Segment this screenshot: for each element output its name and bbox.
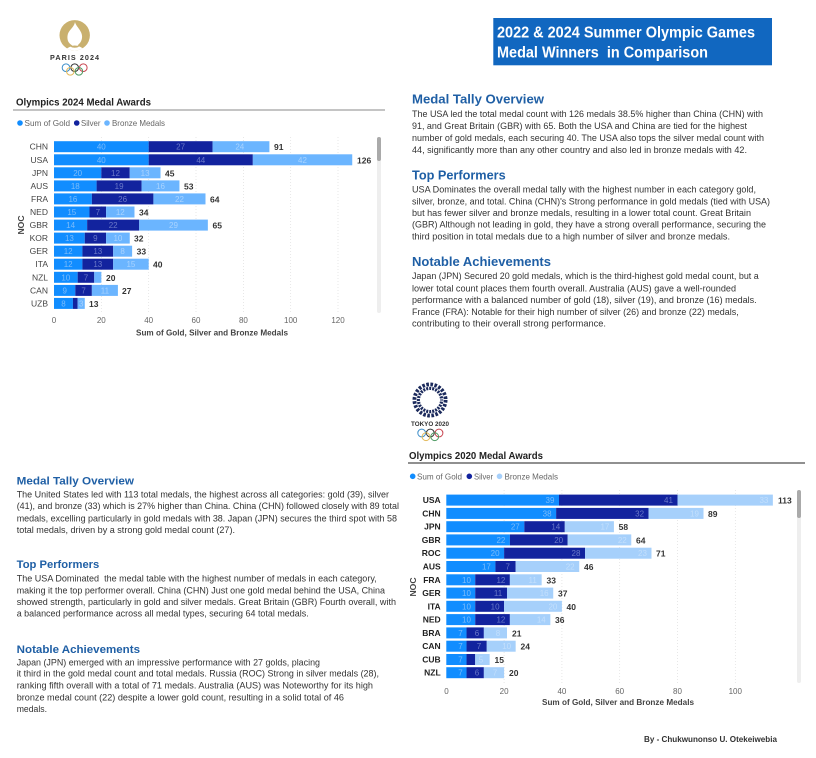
bar: USA: 40 (97, 156, 106, 165)
bar: NZL: NZL (424, 668, 441, 678)
legend 2024: Sum of Gold (24, 119, 70, 128)
chart: Olympics 2024 medal awards (13, 96, 385, 338)
bar: GER: 16 (540, 589, 549, 598)
bar: ITA: 20 (548, 602, 558, 611)
text block: 2020 medal tally overview: (41), and bronze (33) which is 27% higher than China. China (CHN) followed closely with 89 total (17, 501, 399, 512)
legend 2020: Sum of Gold (417, 472, 462, 481)
bar: ITA: ITA (428, 601, 441, 611)
x axis ticks 2024: 120 (331, 316, 345, 325)
text block: 2020 medal tally overview: Medal Tally Overview (17, 476, 134, 488)
bar: USA: 33 (759, 496, 769, 505)
bar: JPN: 20 (73, 169, 83, 178)
bar: AUS (31, 180, 194, 191)
bar: GER: 12 (64, 247, 73, 256)
text block: 2020 top performers: showed strength, particularly in gold and silver medals. Great Britain (GBR) Fourth overall, with (17, 597, 396, 608)
bar: NED: 7 (96, 208, 101, 217)
bar: FRA: 12 (496, 576, 506, 585)
bar: GBR: 20 (554, 536, 564, 545)
bar: ROC (422, 548, 666, 559)
chart: Olympics 2020 medal awards (408, 450, 805, 707)
bar: ITA: 13 (93, 260, 103, 269)
bar: CUB: 15 (494, 655, 504, 665)
text block: 2024 notable achievements: contributing to their overall strong performance. (412, 318, 606, 329)
bar: NZL: 10 (61, 273, 71, 282)
bar: USA: 113 (778, 496, 792, 506)
text block: 2024 medal tally overview: number of gold medals, each securing 40. The USA also tops the silver medal count with (412, 133, 764, 144)
bar: JPN: 14 (551, 523, 561, 532)
bar: NED: 12 (496, 616, 506, 625)
bar: USA: 126 (357, 155, 371, 165)
bar: CAN: 10 (502, 642, 512, 651)
bar: FRA: 26 (118, 195, 128, 204)
bar: KOR: 10 (113, 234, 123, 243)
bar: NZL: 6 (475, 669, 480, 678)
bar: CHN: 89 (708, 509, 718, 519)
x axis ticks 2020 (444, 687, 743, 696)
bar: CHN: CHN (30, 142, 48, 152)
bar: BRA: 21 (512, 628, 522, 638)
bar: ROC: 20 (491, 549, 500, 558)
text block: 2020 notable achievements: Notable Achievements (17, 644, 140, 656)
text block: 2020 notable achievements: it third in the gold medal count and total medals. Russia (ROC) Strong in silver medals (28), (17, 669, 379, 680)
bar: GBR: 22 (109, 221, 118, 230)
text block: 2024 notable achievements: France (FRA): Notable for their high number of silver (26) and bronze (22) medals, (412, 307, 739, 318)
bar: KOR: 13 (65, 234, 74, 243)
bar: ITA: ITA (35, 259, 48, 269)
bar: JPN: 12 (111, 169, 120, 178)
text block: 2024 notable achievements: Japan (JPN) Secured 20 gold medals, which is the third-highest gold medal count, but a (412, 271, 759, 282)
bar: JPN: 27 (511, 523, 520, 532)
bar: USA: 41 (664, 496, 673, 505)
text block: 2024 top performers: silver, bronze, and total. China (CHN)'s Strong performance in gold medals (tied with USA) (412, 197, 770, 208)
bar: AUS: 18 (71, 182, 80, 191)
bar: JPN: 17 (600, 523, 610, 532)
bar: CHN: 27 (176, 143, 186, 152)
bar: CHN: 40 (97, 143, 106, 152)
chart title 2024: Olympics 2024 Medal Awards (16, 96, 151, 108)
bar: GBR (422, 534, 646, 545)
text block: 2020 medal tally overview (17, 476, 399, 536)
bar: ITA: 10 (491, 602, 500, 611)
legend 2020: Bronze Medals (504, 472, 558, 481)
bar: AUS: 53 (184, 181, 194, 191)
text block: 2020 notable achievements: Japan (JPN) emerged with an impressive performance with 27 golds, placing (17, 658, 320, 669)
bar: GER (422, 588, 568, 599)
x axis ticks 2024 (52, 316, 345, 325)
bar: GER: 37 (558, 589, 568, 599)
bar: CHN: 24 (235, 143, 245, 152)
bar: NED: 15 (67, 208, 77, 217)
text block: 2020 medal tally overview: total medals, driven by a strong gold medal count (27). (17, 525, 235, 536)
text block: 2024 medal tally overview: 44, significantly more than any other country and also led in bronze medals with 42. (412, 145, 747, 156)
bar: UZB (31, 298, 99, 309)
bar: CAN: 7 (458, 642, 463, 651)
bar: GBR: 65 (212, 221, 222, 231)
bar: CHN (30, 141, 284, 152)
legend 2024: Silver (81, 119, 101, 128)
bar: NED: 10 (462, 616, 471, 625)
bar: FRA: 11 (529, 576, 537, 585)
bar: ITA: 40 (153, 260, 163, 270)
bar: ITA (35, 259, 163, 270)
bar: ITA: 12 (64, 260, 73, 269)
bar: JPN (424, 521, 628, 532)
bar: FRA: 64 (210, 194, 220, 204)
bar: AUS: AUS (423, 562, 441, 572)
bar: BRA: 8 (496, 629, 501, 638)
bar: CHN: 91 (274, 142, 284, 152)
y axis title 2024: NOC (16, 215, 26, 235)
icon: Paris 2024 logo (50, 20, 99, 75)
bar: ROC: 71 (656, 549, 666, 559)
x axis ticks 2024: 60 (192, 316, 201, 325)
bar: ITA: 40 (566, 602, 576, 612)
bar: ITA (428, 601, 576, 612)
bar: CHN: 38 (543, 509, 552, 518)
text block: 2024 notable achievements: lower total count places them fourth overall. Australia (AUS) gave a well-rounded (412, 283, 736, 294)
x axis ticks 2024: 100 (284, 316, 298, 325)
bar: JPN: 45 (165, 168, 175, 178)
bar: NED: 14 (537, 616, 546, 625)
bar: CHN (422, 508, 718, 519)
bar: AUS: 16 (156, 182, 165, 191)
bar: GER: 11 (494, 589, 503, 598)
bar: JPN: JPN (424, 522, 441, 532)
bar: NED (423, 614, 565, 625)
text block: 2020 top performers: The USA Dominated the medal table with the highest number of medals in each category, (17, 573, 377, 584)
bar: FRA: 33 (546, 575, 556, 585)
bar: NZL: 7 (493, 669, 498, 678)
text block: 2024 notable achievements (412, 255, 759, 329)
bar: CAN: 7 (81, 286, 86, 295)
bar: USA: 44 (196, 156, 206, 165)
text block: 2020 top performers: Top Performers (17, 559, 99, 571)
chart title 2020: Olympics 2020 Medal Awards (409, 450, 543, 462)
banner title: Medal Winners in Comparison (497, 44, 708, 62)
bar: UZB: UZB (31, 298, 48, 308)
bar: NZL: 7 (84, 273, 89, 282)
text block: 2024 medal tally overview: Medal Tally Overview (412, 92, 544, 106)
banner title (493, 18, 772, 65)
bar: USA: USA (423, 495, 441, 505)
legend 2024: Bronze Medals (112, 119, 165, 128)
bar: CAN: 11 (101, 286, 110, 295)
x axis ticks 2020: 100 (729, 687, 743, 696)
bar: NED: 36 (555, 615, 565, 625)
bar: CAN: CAN (30, 285, 48, 295)
text block: 2024 top performers: (GBR) Although not leading in gold, they have a strong overall performance, securing the (412, 219, 766, 230)
x axis ticks 2020: 40 (557, 687, 567, 696)
text block: 2020 medal tally overview: medals, excelling particularly in gold medals with 38. Japan (JPN) secures the third spot with 58 (17, 513, 397, 524)
text block: 2020 medal tally overview: The United States led with 113 total medals, the highest across all categories: gold (39), silver (17, 490, 390, 501)
x axis title 2024: Sum of Gold, Silver and Bronze Medals (136, 328, 288, 338)
scrollbar 2024 (377, 137, 381, 313)
text block: 2024 medal tally overview: The USA led the total medal count with 126 medals 38.5% higher than China (CHN) with (412, 109, 763, 120)
bar: GER: 33 (137, 247, 146, 257)
bar: CHN: 19 (690, 509, 699, 518)
bar: JPN: 58 (619, 522, 628, 532)
bar: KOR: KOR (30, 233, 48, 243)
legend 2024 (17, 119, 165, 128)
x axis ticks 2020: 20 (500, 687, 509, 696)
bar: KOR: 32 (134, 234, 144, 244)
legend 2020 (410, 472, 558, 481)
bar: GBR: 29 (169, 221, 178, 230)
bar: GER: 10 (462, 589, 471, 598)
x axis ticks 2024: 40 (144, 316, 154, 325)
bar: NED: NED (423, 615, 441, 625)
bar: ITA: 10 (462, 602, 471, 611)
text block: 2020 notable achievements: bronze medal count (22) despite a lower gold count, resulting in a solid total of 46 (17, 692, 344, 703)
bar: KOR: 9 (93, 234, 98, 243)
text block: 2024 top performers: USA Dominates the overall medal tally with the highest number in each category gold, (412, 184, 756, 195)
bar: CAN: 9 (62, 286, 67, 295)
text block: 2020 notable achievements: medals. (17, 704, 47, 715)
bar: BRA (422, 627, 522, 638)
bar: NZL: 20 (106, 273, 116, 283)
bar: CAN (422, 641, 530, 652)
icon: Paris 2024 logo: PARIS 2024 (50, 53, 99, 62)
text block: 2024 medal tally overview: 91, and Great Britain (GBR) with 65. Both the USA and China are tied for the highest (412, 121, 747, 132)
bar: CAN: CAN (422, 641, 441, 651)
text block: 2020 notable achievements: ranking fifth overall with a total of 71 medals. Australia (AUS) was Noteworthy for its high (17, 681, 373, 692)
bar: GBR: 14 (66, 221, 76, 230)
x axis title 2020: Sum of Gold, Silver and Bronze Medals (542, 697, 694, 707)
bar: AUS (423, 561, 594, 572)
bar: CAN: 7 (477, 642, 482, 651)
x axis ticks 2020: 60 (615, 687, 625, 696)
bar: FRA: 16 (68, 195, 78, 204)
bar: GBR: 22 (496, 536, 506, 545)
bar: NZL: NZL (32, 272, 48, 282)
text block: 2020 top performers: making it the top performer overall. China (CHN) Just one gold medal behind the USA, China (17, 586, 386, 597)
bar: GER: 8 (120, 247, 125, 256)
bar: BRA: 7 (458, 629, 463, 638)
bar: UZB: 13 (89, 299, 99, 309)
bar: ITA: 15 (126, 260, 136, 269)
bar: USA: 42 (298, 156, 307, 165)
bar: UZB: 8 (61, 299, 66, 308)
bar: GER: GER (30, 246, 48, 256)
x axis ticks 2024: 20 (97, 316, 106, 325)
bar: BRA: 6 (475, 629, 480, 638)
author credit: By - Chukwunonso U. Otekeiwebia (644, 734, 777, 744)
bar: GER: 13 (93, 247, 103, 256)
bar: NZL: 20 (509, 668, 519, 678)
bar: FRA: 10 (462, 576, 471, 585)
text block: 2024 medal tally overview (412, 92, 764, 156)
bar: CHN: CHN (422, 508, 441, 518)
bar: USA (31, 154, 371, 165)
bar: GBR: GBR (422, 535, 441, 545)
bar: GBR: GBR (30, 220, 48, 230)
bar: CAN (30, 285, 132, 296)
bar: AUS: 19 (115, 182, 124, 191)
text block: 2024 top performers: but has fewer silver and bronze medals, resulting in a lower total count. Great Britain (412, 208, 751, 219)
bar: NZL: 7 (458, 669, 463, 678)
bar: FRA: FRA (423, 575, 441, 585)
bar: GBR (30, 220, 222, 231)
bar: FRA (31, 193, 220, 204)
bar: CUB: 7 (458, 656, 463, 664)
text block: 2020 notable achievements (17, 644, 379, 715)
bar: GER (30, 246, 146, 257)
text block: 2020 top performers (17, 559, 396, 619)
bar: NED: 34 (139, 208, 149, 218)
text block: 2020 top performers: a balanced performance across all medal types, securing 64 total medals. (17, 608, 309, 619)
bar: JPN (32, 167, 175, 178)
text block: 2024 top performers (412, 168, 770, 242)
bar: CUB: CUB (422, 654, 441, 664)
bar: GBR: 64 (636, 535, 646, 545)
bar: JPN: 13 (141, 169, 150, 178)
x axis ticks 2020: 0 (444, 687, 449, 696)
text block: 2024 notable achievements: performance with a balanced number of gold (18), silver (19), and bronze (16) medals. (412, 295, 757, 306)
text block: 2024 notable achievements: Notable Achievements (412, 255, 551, 269)
bar: AUS: 22 (566, 562, 575, 572)
bar: AUS: 17 (482, 562, 491, 572)
bar: AUS: 7 (505, 562, 510, 572)
bar: BRA: BRA (422, 628, 441, 638)
bar: USA: USA (31, 155, 48, 165)
bar: ROC: 23 (638, 549, 647, 558)
y axis title 2020: NOC (408, 577, 418, 597)
legend 2020: Silver (474, 472, 493, 481)
bar: AUS: AUS (31, 181, 48, 191)
bar: NZL (32, 272, 116, 283)
bar: KOR (30, 233, 144, 244)
bar: CHN: 32 (635, 509, 645, 518)
x axis ticks 2024: 80 (239, 316, 248, 325)
bar: UZB: 3 (79, 299, 84, 308)
bar: FRA: 22 (175, 195, 184, 204)
bar: NED (30, 206, 149, 218)
bar: FRA (423, 574, 556, 585)
bar: AUS: 46 (584, 562, 594, 572)
banner title: 2022 & 2024 Summer Olympic Games (497, 24, 755, 42)
bar: NED: 12 (116, 208, 125, 217)
bar: USA (423, 495, 792, 506)
bar: FRA: FRA (31, 194, 48, 204)
bar: CUB (422, 654, 504, 665)
bar: CAN: 27 (122, 286, 132, 296)
bar: ROC: ROC (422, 548, 441, 558)
icon: Tokyo 2020 logo (411, 384, 449, 441)
bar: CUB: 5 (479, 656, 484, 664)
x axis ticks 2020: 80 (673, 687, 682, 696)
bar: NZL (424, 667, 519, 678)
scrollbar 2020 (797, 490, 801, 683)
text block: 2024 top performers: Top Performers (412, 168, 506, 182)
text block: 2024 top performers: third position in total medals due to a high number of silver and bronze medals. (412, 231, 730, 242)
icon: Tokyo 2020 logo: TOKYO 2020 (411, 421, 449, 428)
bar: GBR: 22 (618, 536, 627, 545)
bar: CAN: 24 (520, 642, 530, 652)
bar: NED: NED (30, 207, 48, 217)
x axis ticks 2024: 0 (52, 316, 57, 325)
bar: ROC: 28 (572, 549, 581, 558)
bar: JPN: JPN (32, 168, 48, 178)
bar: GER: GER (422, 588, 441, 598)
bar: USA: 39 (546, 496, 555, 505)
